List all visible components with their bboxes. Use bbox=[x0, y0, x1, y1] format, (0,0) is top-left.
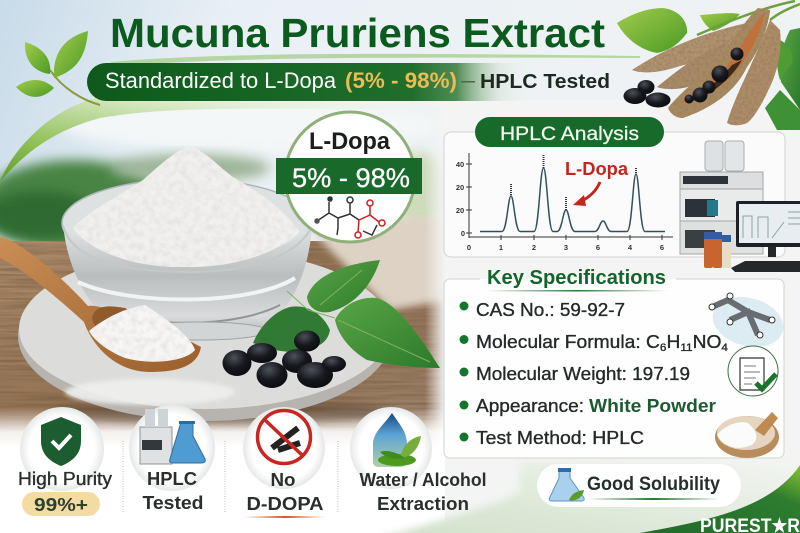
chromatogram chart: 6 bbox=[660, 243, 664, 252]
spec: test method: Test Method: HPLC bbox=[476, 428, 644, 448]
99% pill: 99%+ bbox=[34, 495, 88, 515]
chromatogram chart: 0 bbox=[467, 243, 471, 252]
green swoosh and leaf sprig bbox=[0, 31, 640, 182]
powder bowl on marble plate bbox=[18, 147, 392, 424]
icon: water drop and leaf bbox=[350, 407, 432, 489]
mucuna pods and leaves bbox=[617, 1, 800, 130]
icon: flask bbox=[549, 468, 584, 501]
chromatogram chart: 6 bbox=[596, 243, 600, 252]
icon: powder in wooden bowl bbox=[715, 412, 779, 458]
feature: no D-DOPA: No bbox=[270, 470, 296, 490]
chromatogram chart: 1 bbox=[499, 243, 503, 252]
feature: HPLC tested bbox=[129, 405, 215, 513]
HPLC analysis panel bbox=[444, 117, 800, 272]
dividers bbox=[123, 441, 338, 513]
chromatogram chart: 40 bbox=[456, 160, 464, 169]
feature: water/alcohol extraction: Extraction bbox=[377, 494, 469, 514]
subtitle banner bbox=[87, 63, 647, 101]
HPLC header pill bbox=[475, 117, 664, 147]
title: Mucuna Pruriens Extract bbox=[110, 10, 605, 56]
feature: no D-DOPA: D-DOPA bbox=[246, 494, 324, 514]
pod 3 open with seeds bbox=[668, 8, 770, 118]
spec: appearance bbox=[460, 396, 716, 416]
feature: high purity: High Purity bbox=[18, 469, 112, 489]
specifications heading: Key Specifications bbox=[487, 267, 666, 289]
molecule structure bbox=[315, 197, 385, 238]
spec: molecular formula: 6 bbox=[660, 342, 666, 354]
feature: water/alcohol extraction: Water / Alcohol bbox=[360, 470, 486, 490]
HPLC header pill: HPLC Analysis bbox=[500, 124, 639, 145]
chromatogram chart: 0 bbox=[461, 229, 465, 238]
pale green lower-right wash bbox=[375, 462, 800, 533]
spec: molecular formula bbox=[460, 332, 728, 354]
pod 2 bbox=[657, 42, 735, 89]
subtitle banner: (5% - 98%) bbox=[345, 68, 457, 93]
pod 4 bbox=[727, 20, 781, 125]
icon: certificate check bbox=[728, 346, 778, 396]
icon: HPLC instrument and flask bbox=[129, 405, 215, 491]
spec: molecular formula: NO bbox=[693, 332, 721, 352]
feature: water/alcohol extraction bbox=[350, 407, 486, 514]
L-Dopa peak label: L-Dopa bbox=[565, 159, 629, 179]
feature: HPLC tested: Tested bbox=[142, 493, 204, 513]
L-Dopa badge: L-Dopa bbox=[309, 128, 391, 155]
green corner swoosh bbox=[640, 465, 800, 533]
arrow to L-Dopa peak bbox=[573, 182, 600, 206]
chromatogram chart bbox=[456, 153, 673, 252]
chromatogram chart: 2 bbox=[532, 243, 536, 252]
spec: appearance: Appearance: bbox=[476, 396, 584, 416]
chromatogram chart: 4 bbox=[628, 243, 633, 252]
good solubility pill: Good Solubility bbox=[587, 474, 720, 495]
pod 1 bbox=[632, 23, 747, 72]
spec: appearance: White Powder bbox=[589, 396, 716, 416]
icon: shield bbox=[20, 407, 104, 491]
powder heap bbox=[73, 147, 300, 267]
L-Dopa badge: 5% - 98% bbox=[292, 163, 410, 193]
subtitle banner: Standardized to L-Dopa bbox=[105, 68, 337, 93]
good solubility pill bbox=[537, 464, 741, 507]
key specifications panel bbox=[444, 267, 789, 458]
feature: HPLC tested: HPLC bbox=[147, 469, 197, 489]
spec: molecular formula: 11 bbox=[680, 342, 693, 354]
icon: molecule model bbox=[707, 290, 789, 354]
HPLC instrument bbox=[680, 141, 800, 272]
L-Dopa badge bbox=[276, 112, 422, 242]
feature: no D-DOPA bbox=[243, 407, 325, 518]
underline bbox=[245, 516, 325, 518]
spec: molecular formula: H bbox=[666, 332, 680, 352]
marble plate bbox=[18, 251, 392, 421]
chromatogram chart: 20 bbox=[456, 206, 464, 215]
chromatogram chart: 20 bbox=[456, 183, 464, 192]
chromatogram chart: 3 bbox=[564, 243, 568, 252]
spec: molecular formula: 4 bbox=[721, 342, 728, 354]
black beans and green leaves bbox=[222, 260, 440, 388]
spec: molecular formula: Molecular Formula: C bbox=[476, 332, 648, 352]
wooden spoon bbox=[0, 237, 201, 372]
spec: molecular weight: Molecular Weight: 197.19 bbox=[476, 364, 690, 384]
feature: high purity bbox=[18, 407, 112, 516]
spec: CAS number: CAS No.: 59-92-7 bbox=[476, 300, 625, 320]
subtitle banner: HPLC Tested bbox=[480, 71, 610, 93]
icon: prohibited molecule bbox=[243, 407, 325, 489]
